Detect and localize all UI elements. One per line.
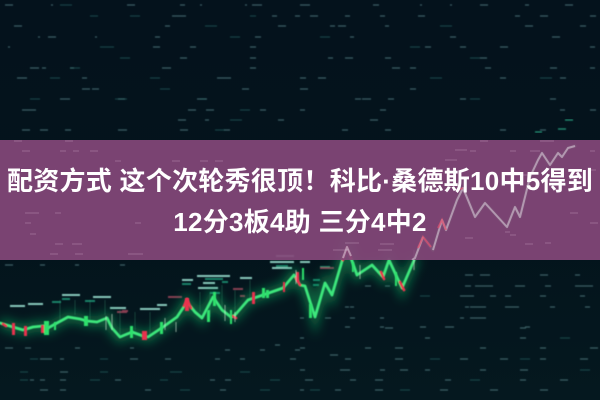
vertical candle wicks faint — [60, 280, 250, 335]
title band — [0, 140, 600, 260]
chart line: red segments — [3, 247, 404, 326]
data ticks: lower field — [5, 265, 598, 390]
chart line: rising price series — [0, 146, 575, 337]
title text — [7, 166, 593, 237]
faint ticks and chart on band — [14, 140, 598, 260]
title text: 12分3板4助 三分4中2 — [173, 207, 427, 237]
line chart — [0, 146, 575, 337]
small chart marker top right — [535, 120, 573, 132]
line chart glow — [0, 247, 415, 337]
candlesticks — [12, 250, 414, 340]
data labels above chart — [10, 256, 334, 312]
data ticks: upper field — [5, 5, 596, 130]
title text: 配资方式 这个次轮秀很顶！科比·桑德斯10中5得到 — [7, 166, 593, 196]
